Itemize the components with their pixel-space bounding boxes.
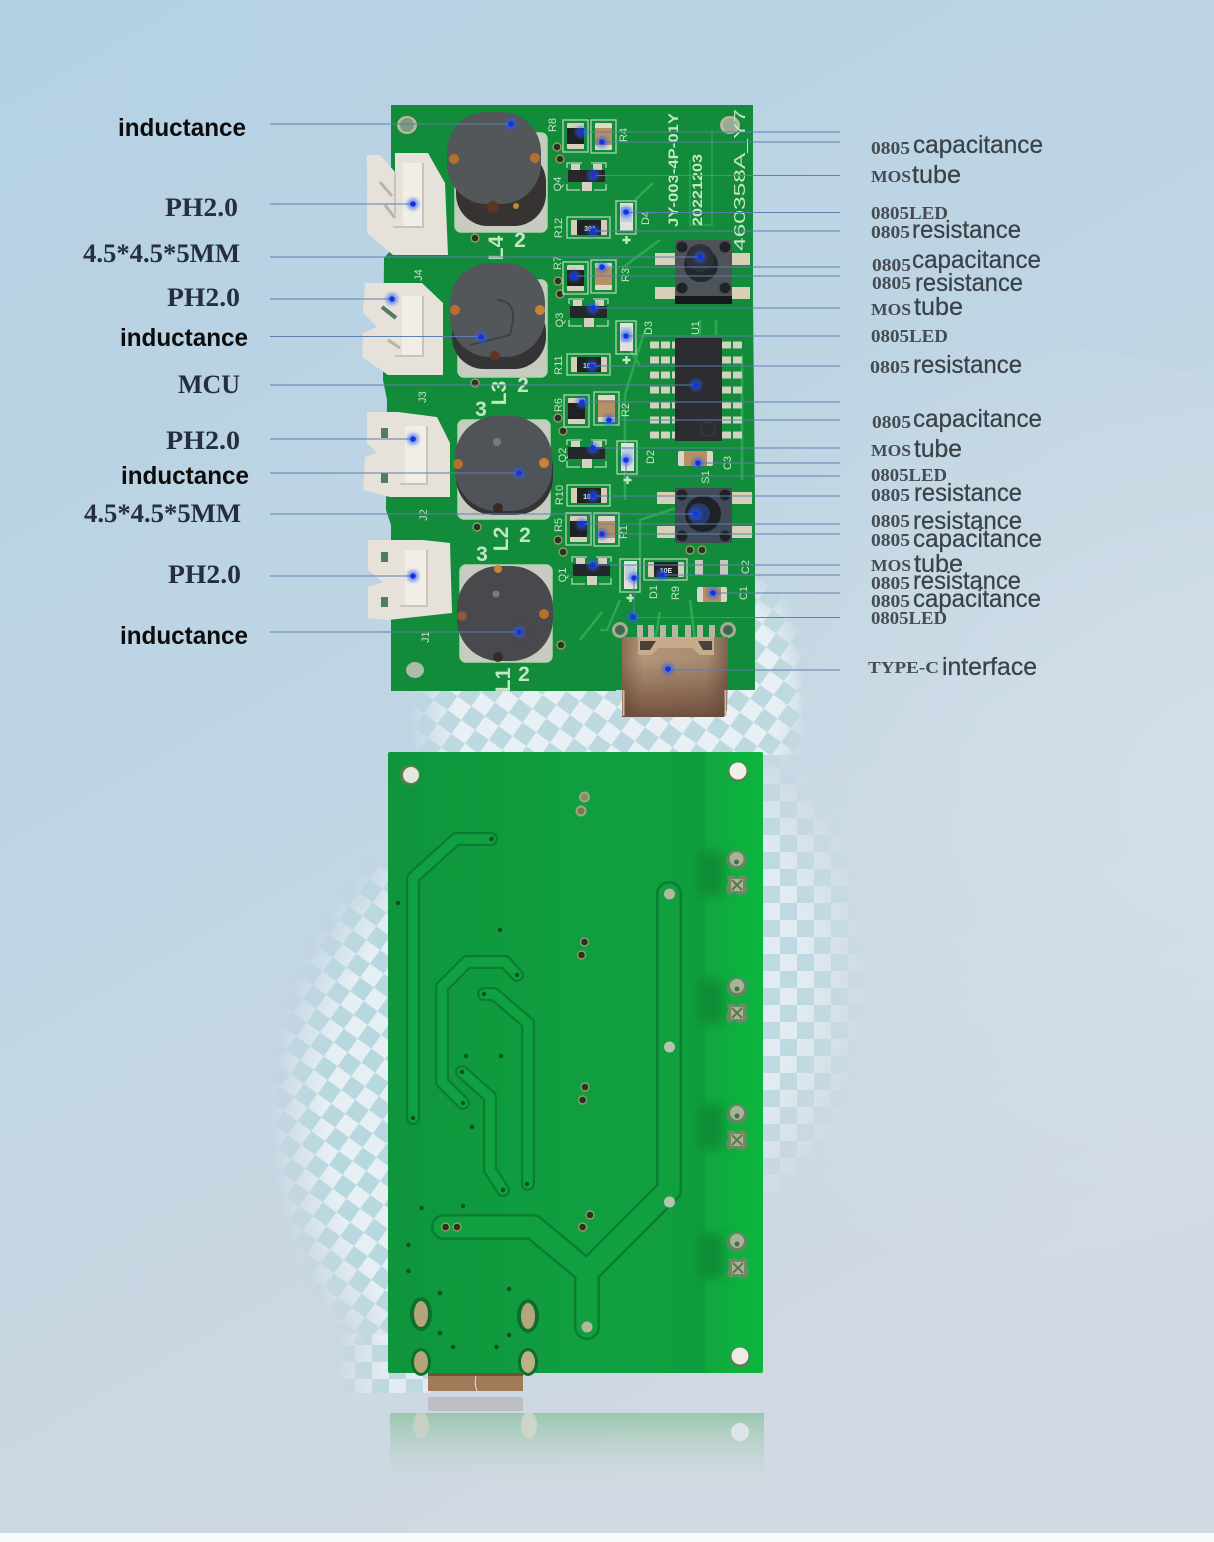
board silkscreen text: R11 [553,355,565,375]
board silkscreen text: 3 [476,543,488,566]
label: TYPE-C interface: interface [942,653,1037,681]
background checker pattern: left crescent [284,868,430,1393]
board silkscreen text: Q2 [557,448,569,462]
label: PH2.0: PH2.0 [165,193,238,222]
label: 0805 resistance: 0805 [871,573,910,593]
right labels [868,131,1043,681]
bottom PCB board (back) [388,752,763,1391]
label: PH2.0: PH2.0 [166,426,240,455]
board silkscreen text: R7 [552,256,564,270]
label: 0805 capacitance: 0805 [872,412,911,432]
board silkscreen text: R5 [553,518,565,532]
board silkscreen text: 2 [514,229,526,252]
label: 0805LED: 0805LED [871,465,947,485]
connector J3 PH2.0 [362,283,443,375]
label: MOS tube [871,435,962,463]
label: 0805LED: 0805LED [871,203,948,223]
board silkscreen text: 2 [517,374,529,397]
label: 0805 resistance: 0805 [871,222,910,242]
board silkscreen text: J2 [418,509,430,521]
label: MOS tube: MOS [871,441,911,460]
label: 0805 resistance [871,479,1022,507]
connector J1 PH2.0 [368,540,452,620]
board silkscreen text: Q4 [552,177,564,191]
label: 0805 resistance: 0805 [871,511,910,531]
label: TYPE-C interface: TYPE-C [868,658,939,677]
inductor L1 [457,565,553,662]
background light wash [420,340,1214,1260]
0805 LEDs [616,201,640,602]
connector solder joints [726,850,749,1278]
board silkscreen text: R12 [553,218,565,238]
trace fills [413,839,528,1190]
bottom white band [0,1533,1214,1542]
label: 0805 capacitance: 0805 [871,138,910,158]
board silkscreen text: D3 [643,321,655,335]
board reflection [390,1397,764,1485]
label: MOS tube: tube [914,550,963,578]
inductor L2 [453,416,553,519]
Type-C oval solder pads [410,1297,539,1376]
push button S1 [657,488,752,543]
label: MOS tube: tube [914,435,962,463]
background checker pattern: right column [763,775,843,1158]
label: 0805 resistance: resistance [912,216,1021,244]
label: 0805 resistance [872,269,1023,297]
label: 4.5*4.5*5MM: 4.5*4.5*5MM [84,499,241,528]
label: 0805 capacitance: 0805 [871,530,910,550]
board silkscreen text: D1 [648,585,660,599]
label: MOS tube: tube [914,293,963,321]
board silkscreen text: L4 [485,235,508,260]
MOS tubes [567,163,611,585]
board substrate [383,105,755,691]
board silkscreen text: 2 [518,663,530,686]
board silkscreen text: J1 [420,631,432,643]
board silkscreen text: R2 [620,403,632,417]
label: 0805 capacitance: capacitance [913,585,1041,613]
label: 4.5*4.5*5MM: 4.5*4.5*5MM [83,239,240,268]
0805 resistors: 301 [584,226,596,233]
label: TYPE-C interface [868,653,1037,681]
label: MOS tube: MOS [871,556,911,575]
board silkscreen text: L1 [492,667,515,692]
0805 resistors: 105 [583,494,595,501]
board silkscreen text [413,109,752,692]
label: MOS tube [871,161,961,189]
label: 0805 resistance: resistance [915,269,1023,297]
left labels [83,114,249,650]
board silkscreen text: Q3 [554,313,566,327]
board silkscreen text: D2 [645,450,657,464]
0805 capacitors [591,120,728,602]
label: 0805 capacitance: 0805 [872,255,911,275]
label: PH2.0: PH2.0 [168,560,241,589]
connector solder shadows [700,852,724,1278]
mounting holes [397,116,740,678]
label: 0805 capacitance: 0805 [871,591,910,611]
board silkscreen text: 460358A_Y7 [732,109,749,251]
background checker pattern: between boards [418,583,800,755]
label: 0805 capacitance: capacitance [913,131,1043,159]
label: MOS tube: MOS [871,167,911,186]
board silkscreen text: R10 [554,485,566,505]
label: 0805 capacitance: capacitance [913,405,1042,433]
board silkscreen text: 3 [475,398,487,421]
label: 0805LED: 0805LED [871,608,947,628]
Type-C shell edge [428,1373,523,1391]
board silkscreen text: C2 [740,560,752,574]
label: 0805 capacitance: capacitance [912,246,1041,274]
label: inductance: inductance [120,324,248,352]
label: 0805 resistance: 0805 [870,357,910,377]
inductor L3 [450,263,547,377]
board silkscreen text: R3 [620,268,632,282]
board substrate [388,752,763,1373]
board silkscreen text: D4 [640,211,652,225]
0805 resistors: 10F [583,363,596,370]
copper traces [580,183,742,640]
board silkscreen text: R8 [547,118,559,132]
label: 0805 resistance: resistance [913,507,1022,535]
back vias [396,792,675,1349]
board silkscreen text: L3 [488,381,511,405]
label: 0805 resistance: resistance [913,567,1021,595]
callout dots [386,118,719,675]
label: MOS tube [871,293,963,321]
label: inductance: inductance [121,462,249,490]
board silkscreen text: R1 [618,525,630,539]
label: 0805 resistance [870,351,1022,379]
label: 0805 resistance: resistance [913,351,1022,379]
connector J4 PH2.0 [367,153,448,255]
board silkscreen text: C1 [738,586,750,600]
board silkscreen text: J4 [413,269,425,281]
connector J2 PH2.0 [363,412,450,497]
left leader lines [270,124,700,632]
board silkscreen text: R4 [618,128,630,142]
board silkscreen text: J3 [417,391,429,403]
board silkscreen text: U1 [690,321,702,335]
label: PH2.0: PH2.0 [167,283,240,312]
label: 0805 resistance [871,567,1021,595]
label: MOS tube: MOS [871,300,911,319]
board silkscreen text: Q1 [557,568,569,582]
label: MCU: MCU [178,370,240,399]
0805 resistors: 10E [660,568,673,575]
top PCB board (front) [362,105,755,717]
label: inductance: inductance [118,114,246,142]
label: inductance: inductance [120,622,248,650]
board silkscreen text: S1 [700,470,712,484]
board silkscreen text: R6 [553,398,565,412]
label: 0805 resistance: resistance [914,479,1022,507]
board silkscreen text: 2 [519,524,531,547]
right leader lines [574,132,840,670]
trace outlines [413,839,528,1190]
board silkscreen text: R9 [670,586,682,600]
label: MOS tube [871,550,963,578]
board silkscreen text: C3 [722,456,734,470]
vias [470,142,707,650]
USB Type-C connector [612,622,736,717]
label: 0805 resistance [871,507,1022,535]
0805 resistors [563,120,687,580]
label: 0805 capacitance: capacitance [913,525,1042,553]
board silkscreen text: JY-003-4P-01Y [665,112,681,227]
label: 0805 resistance: 0805 [871,485,910,505]
MCU U1 chip [650,338,742,441]
label: 0805 resistance: 0805 [872,273,911,293]
push button upper [655,240,750,304]
mounting holes [400,762,750,1367]
label: 0805LED: 0805LED [871,326,948,346]
label: MOS tube: tube [912,161,961,189]
inductor L4 [447,112,547,232]
board silkscreen text: 20221203 [689,154,705,226]
board silkscreen text: L2 [490,527,513,551]
